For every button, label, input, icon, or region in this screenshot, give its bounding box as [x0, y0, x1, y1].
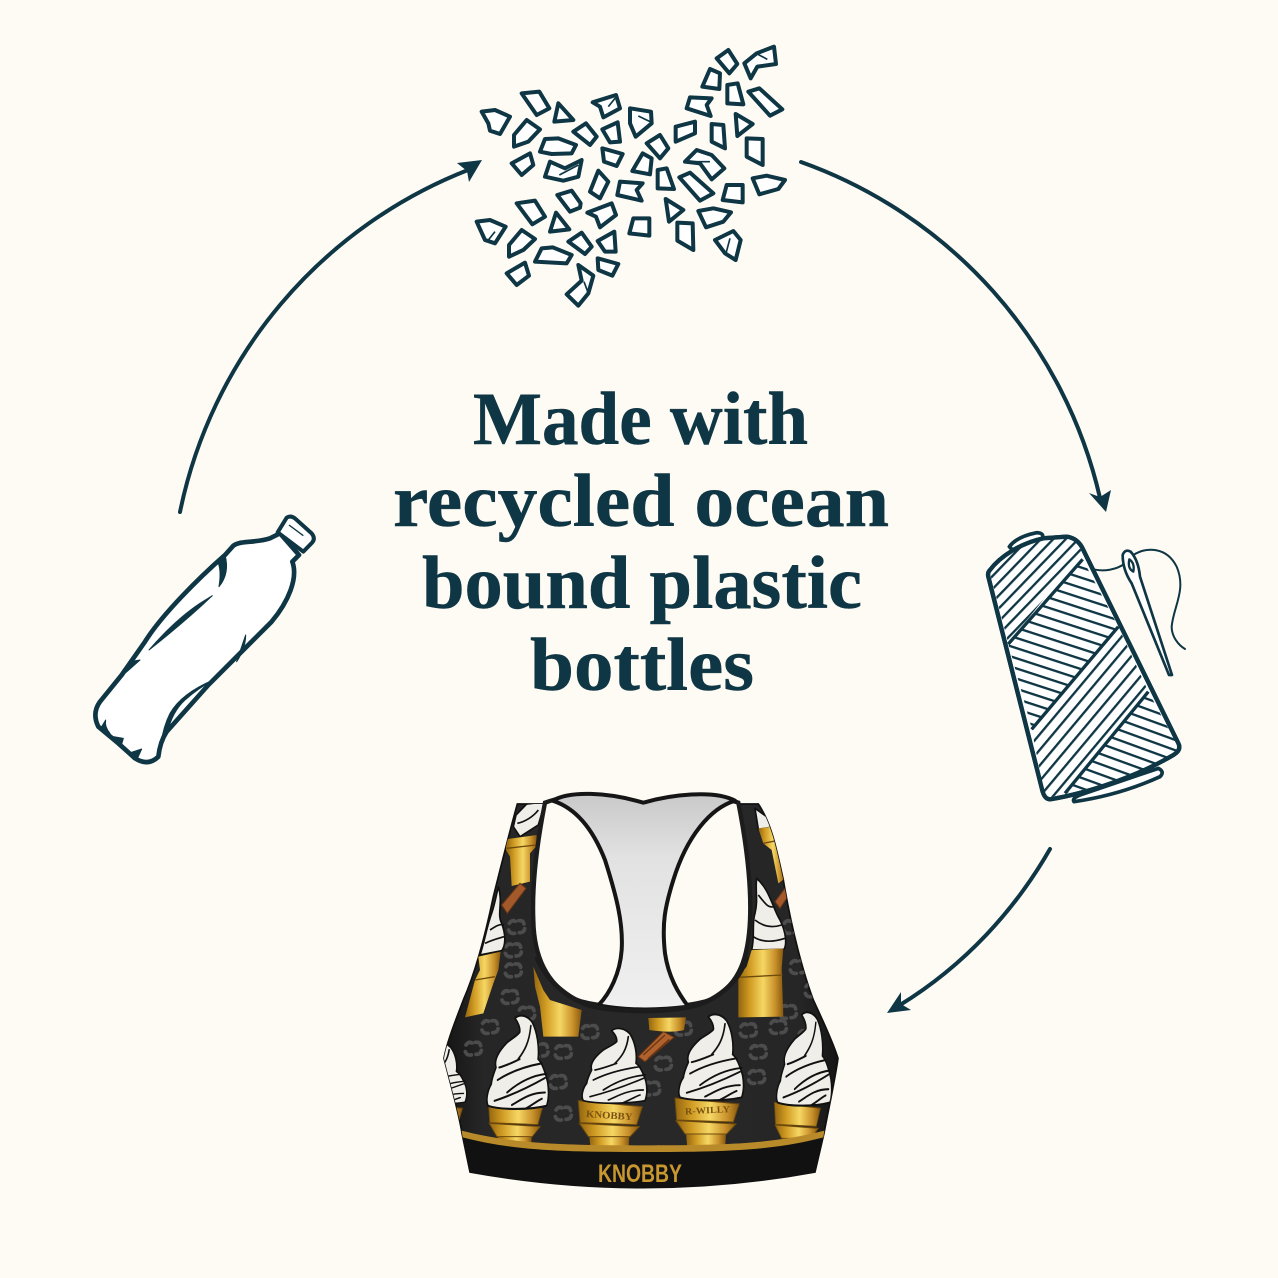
- title: made with recycled ocean bound plastic bottles: Made with: [473, 378, 808, 461]
- upper cones: [465, 827, 785, 1037]
- icon: plastic flakes: [477, 47, 785, 306]
- title: made with recycled ocean bound plastic bottles: bottles: [530, 624, 754, 707]
- hatch winding sections: [990, 538, 1178, 797]
- chocolate flakes: [502, 883, 790, 913]
- cone bottom visible under neckline: [648, 1017, 686, 1032]
- upper swirl lines: [485, 810, 785, 943]
- print pattern: [402, 802, 832, 1162]
- top cap: [1009, 533, 1043, 551]
- bottle wrinkles: [102, 525, 303, 760]
- spool body: [988, 537, 1179, 799]
- gold band stripe: [462, 1131, 824, 1152]
- cone text: R-WILLY: R-WILLY: [685, 1105, 731, 1117]
- front neckline binding: [537, 957, 747, 1011]
- bottom cap: [1073, 768, 1162, 802]
- cone ring lines: [475, 840, 783, 980]
- title: made with recycled ocean bound plastic bottles: bound plastic: [422, 542, 862, 625]
- lower row cones: [456, 1107, 463, 1120]
- bottle cap: [278, 517, 314, 552]
- arrow: thread to garment: [887, 849, 1050, 1013]
- upper left swirls: [480, 802, 786, 955]
- cone text: KNOBBY: KNOBBY: [586, 1109, 634, 1123]
- brand wordmark: KNOBBY: [598, 1160, 682, 1188]
- title: made with recycled ocean bound plastic bottles: recycled ocean: [393, 460, 889, 543]
- bra body: [444, 804, 838, 1188]
- waist band: [463, 1137, 823, 1188]
- neck and arm opening: [533, 795, 750, 1008]
- icon: crushed plastic bottle: [95, 517, 314, 762]
- icon: thread spool and needle: [988, 533, 1185, 802]
- thread line: [1093, 550, 1185, 649]
- infographic: recycling cycle: [93, 44, 1186, 1188]
- arrow: bottle to flakes: [180, 160, 482, 512]
- needle: [1123, 551, 1172, 675]
- arrow: flakes to thread: [801, 162, 1111, 512]
- product: sports bra with ice cream print: [402, 794, 838, 1188]
- racerback panel: [553, 794, 735, 1010]
- title: made with recycled ocean bound plastic bottles: [393, 378, 889, 707]
- bottle body: [95, 533, 299, 762]
- leopard spots: [465, 921, 821, 1120]
- needle eye: [1129, 559, 1134, 572]
- chocolate flake: [638, 1032, 674, 1062]
